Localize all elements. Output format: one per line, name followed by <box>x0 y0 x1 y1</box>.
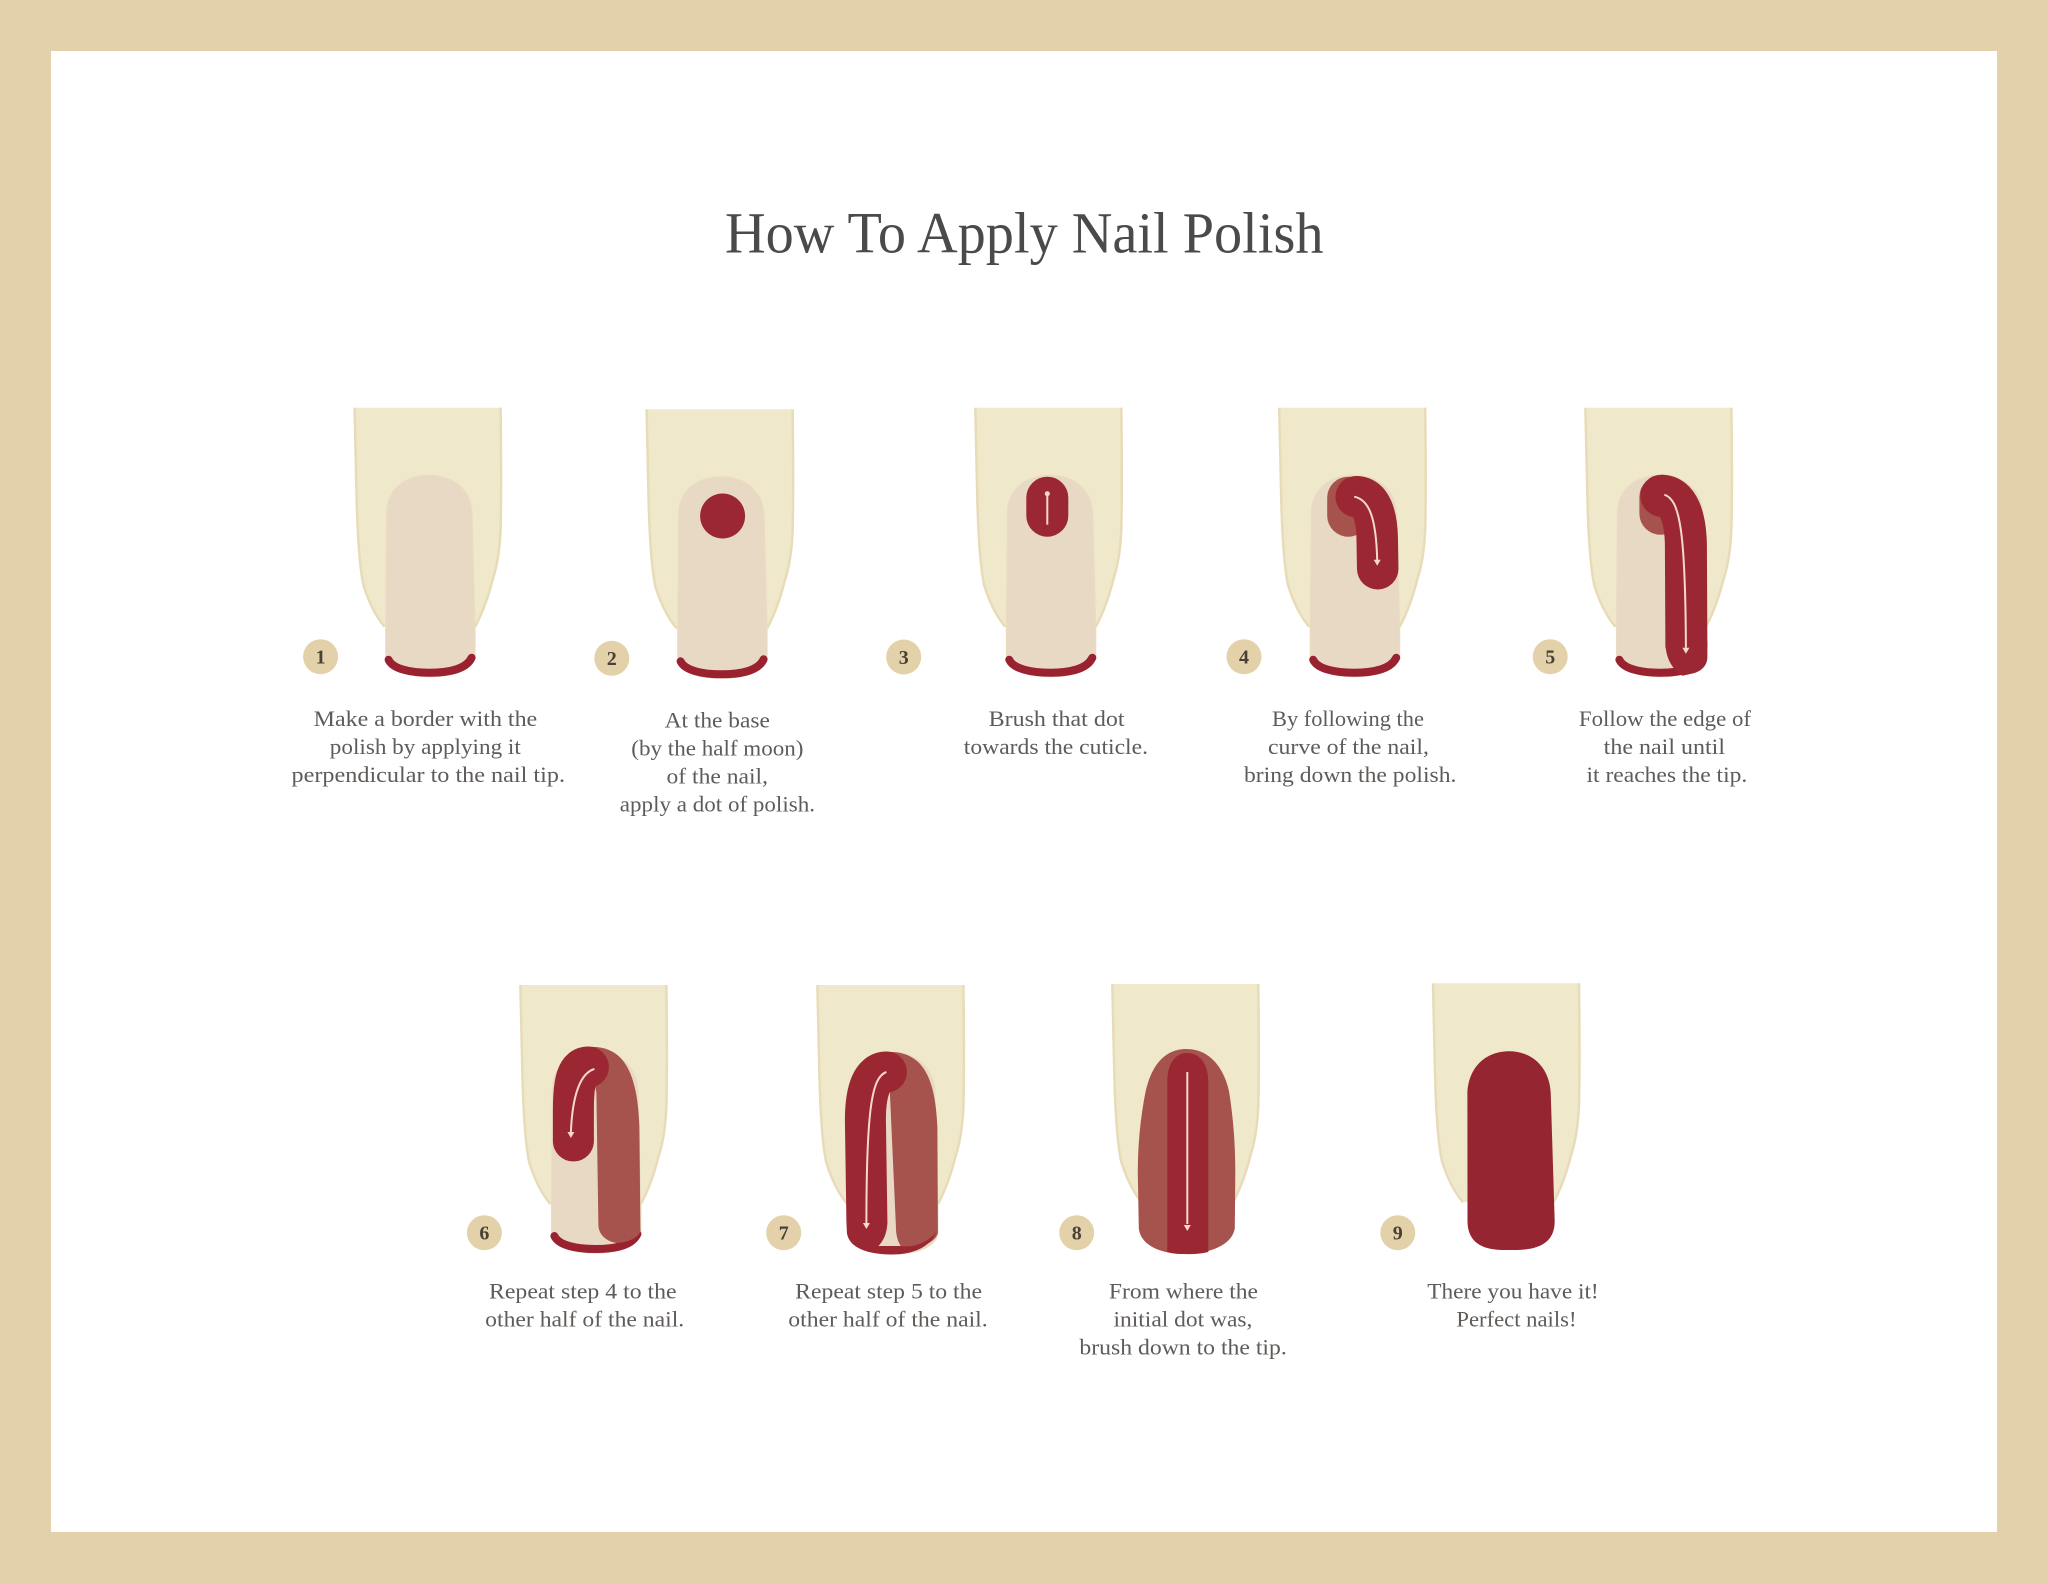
caption 2: apply a dot of polish. <box>620 792 815 817</box>
caption 3: towards the cuticle. <box>964 734 1148 759</box>
step 9 <box>1380 983 1599 1331</box>
caption 8: brush down to the tip. <box>1079 1334 1287 1359</box>
caption 5: the nail until <box>1604 734 1725 759</box>
nail illustration 8 <box>1112 984 1259 1254</box>
caption 1: perpendicular to the nail tip. <box>292 762 565 787</box>
nail illustration 1 <box>355 408 501 677</box>
caption 5: Follow the edge of <box>1579 706 1752 731</box>
caption 9: Perfect nails! <box>1456 1306 1576 1331</box>
number badge 3 <box>886 640 921 674</box>
number badge 5: 5 <box>1545 646 1555 668</box>
caption 7: other half of the nail. <box>788 1306 988 1331</box>
step 7 <box>766 985 988 1331</box>
number badge 5 <box>1533 639 1568 674</box>
caption 6: Repeat step 4 to the <box>489 1278 677 1303</box>
number badge 8: 8 <box>1072 1222 1082 1244</box>
caption 7 <box>788 1278 988 1331</box>
caption 1: polish by applying it <box>330 734 522 759</box>
number badge 8 <box>1059 1215 1094 1250</box>
number badge 2: 2 <box>607 648 617 670</box>
caption 5: it reaches the tip. <box>1586 762 1747 787</box>
caption 1 <box>292 706 565 787</box>
caption 4: curve of the nail, <box>1268 734 1429 759</box>
number badge 6 <box>467 1215 502 1250</box>
caption 4: By following the <box>1272 706 1424 731</box>
nail illustration 2 <box>647 409 793 678</box>
nail illustration 4 <box>1279 408 1426 677</box>
number badge 7: 7 <box>779 1222 789 1244</box>
step 6 <box>467 985 684 1331</box>
caption 6 <box>485 1278 684 1331</box>
caption 2 <box>620 708 815 817</box>
caption 9: There you have it! <box>1427 1278 1599 1303</box>
step 8 <box>1059 984 1287 1359</box>
number badge 6: 6 <box>479 1222 489 1244</box>
caption 1: Make a border with the <box>314 706 537 731</box>
nail illustration 6 <box>520 985 667 1253</box>
caption 5 <box>1579 706 1752 787</box>
caption 8: initial dot was, <box>1114 1306 1252 1331</box>
number badge 2 <box>594 641 629 676</box>
step 3 <box>886 408 1148 759</box>
number badge 1 <box>303 639 338 674</box>
caption 8: From where the <box>1109 1278 1258 1303</box>
step 2 <box>594 409 815 817</box>
step 4 <box>1226 408 1456 787</box>
step 1 <box>292 408 565 787</box>
nail illustration 5 <box>1585 408 1732 677</box>
number badge 4 <box>1226 639 1262 674</box>
nail illustration 9 <box>1433 983 1580 1250</box>
caption 2: of the nail, <box>666 764 768 789</box>
number badge 3: 3 <box>899 647 909 669</box>
number badge 9 <box>1380 1215 1415 1250</box>
nail illustration 7 <box>817 985 964 1254</box>
nail illustration 3 <box>975 408 1122 677</box>
caption 3 <box>964 706 1148 759</box>
caption 2: At the base <box>665 708 770 733</box>
number badge 1: 1 <box>316 646 326 668</box>
caption 7: Repeat step 5 to the <box>795 1278 982 1303</box>
caption 4 <box>1244 706 1456 787</box>
title: How To Apply Nail Polish <box>725 201 1324 266</box>
caption 8 <box>1079 1278 1287 1359</box>
caption 6: other half of the nail. <box>485 1306 684 1331</box>
number badge 4: 4 <box>1239 646 1249 668</box>
caption 4: bring down the polish. <box>1244 762 1456 787</box>
caption 9 <box>1427 1278 1599 1331</box>
number badge 9: 9 <box>1393 1222 1403 1244</box>
caption 3: Brush that dot <box>989 706 1125 731</box>
step 5 <box>1533 408 1752 787</box>
number badge 7 <box>766 1215 801 1250</box>
caption 2: (by the half moon) <box>631 736 804 761</box>
